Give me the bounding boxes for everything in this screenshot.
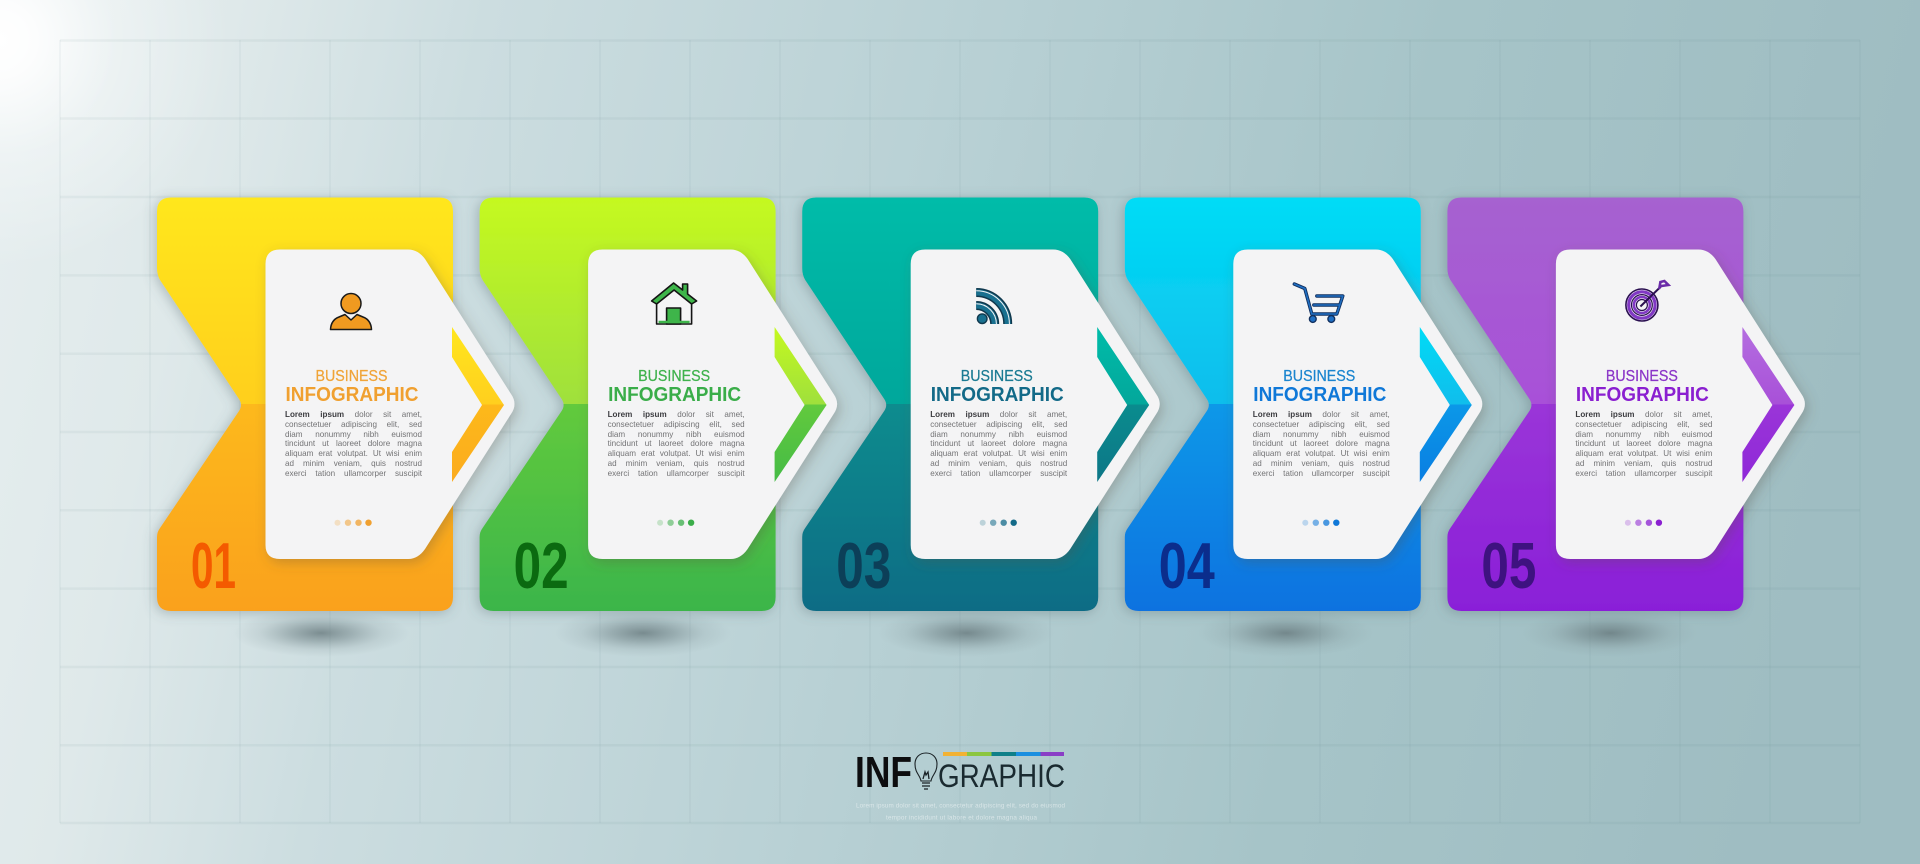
body text 03 <box>930 410 1067 480</box>
body text 02: aliquam erat volutpat. Ut wisi enim <box>608 449 745 458</box>
heading 05: INFOGRAPHIC <box>1576 384 1709 406</box>
icon: shopping cart <box>1294 284 1343 322</box>
body text 05: consectetuer adipiscing elit, sed <box>1575 420 1712 429</box>
pagination dots 01 <box>334 520 372 526</box>
colored chevron card 01 <box>157 198 453 611</box>
heading 03: BUSINESS <box>961 368 1033 385</box>
number 01: 01 <box>191 529 236 602</box>
panel: step 04 <box>1125 198 1482 657</box>
number 02: 02 <box>514 529 569 602</box>
body text 05: exerci tation ullamcorper suscipit <box>1575 468 1712 478</box>
heading 04: INFOGRAPHIC <box>1253 384 1386 406</box>
white content card 05 <box>1556 250 1805 559</box>
body text 02: exerci tation ullamcorper suscipit <box>608 468 745 478</box>
body text 01: Lorem ipsum dolor sit amet, <box>285 410 422 419</box>
heading 05: BUSINESS <box>1606 368 1678 385</box>
body text 03: diam nonummy nibh euismod <box>930 430 1067 438</box>
body text 01: ad minim veniam, quis nostrud <box>285 459 422 468</box>
body text 03: ad minim veniam, quis nostrud <box>930 459 1067 468</box>
heading 04: BUSINESS <box>1283 368 1355 385</box>
colored chevron card 03 <box>802 198 1098 611</box>
body text 03: exerci tation ullamcorper suscipit <box>930 468 1067 478</box>
caption: Lorem ipsum dolor sit amet, consectetur adipiscing elit, sed do eiusmod <box>856 802 1065 810</box>
pagination dots 03 <box>980 520 1017 526</box>
floor shadow 05 <box>1522 609 1698 657</box>
panel: step 03 <box>802 198 1160 657</box>
body text 02: Lorem ipsum dolor sit amet, <box>608 410 745 419</box>
number 04: 04 <box>1159 529 1215 602</box>
floor shadow 01 <box>233 609 409 657</box>
heading 02: BUSINESS <box>638 368 710 385</box>
pagination dots 04 <box>1302 520 1340 526</box>
heading 03: INFOGRAPHIC <box>931 384 1064 406</box>
floor shadow 02 <box>555 609 731 657</box>
number 03: 03 <box>836 529 891 602</box>
heading 04 <box>1253 368 1386 406</box>
body text 03: aliquam erat volutpat. Ut wisi enim <box>930 449 1067 458</box>
body text 04: exerci tation ullamcorper suscipit <box>1253 468 1390 478</box>
panel: step 01 <box>157 198 514 657</box>
colored chevron card 05 <box>1447 198 1743 611</box>
body text 04: ad minim veniam, quis nostrud <box>1253 459 1390 468</box>
floor shadow 04 <box>1198 609 1374 657</box>
body text 05: Lorem ipsum dolor sit amet, <box>1575 410 1712 419</box>
colored chevron card 04 <box>1125 198 1421 611</box>
icon: wifi signal <box>976 291 1009 324</box>
pagination dots 02 <box>657 520 694 526</box>
body text 04: tincidunt ut laoreet dolore magna <box>1253 439 1390 448</box>
heading 01: INFOGRAPHIC <box>286 384 418 406</box>
heading 01 <box>286 368 418 406</box>
body text 04: consectetuer adipiscing elit, sed <box>1253 420 1390 429</box>
icon: house <box>652 283 697 324</box>
rainbow bar <box>943 752 1064 756</box>
heading 01: BUSINESS <box>316 368 388 385</box>
body text 03: consectetuer adipiscing elit, sed <box>930 420 1067 429</box>
colored chevron card 02 <box>480 198 776 611</box>
body text 01: exerci tation ullamcorper suscipit <box>285 468 422 478</box>
panel: step 02 <box>480 198 837 657</box>
body text 04: Lorem ipsum dolor sit amet, <box>1253 410 1390 419</box>
arrow accent 02 <box>775 327 827 482</box>
body text 01: tincidunt ut laoreet dolore magna <box>285 439 422 448</box>
arrow accent 03 <box>1097 327 1149 482</box>
body text 01 <box>285 410 422 480</box>
body text 01: diam nonummy nibh euismod <box>285 430 422 438</box>
body text 02: consectetuer adipiscing elit, sed <box>608 420 745 429</box>
panel: step 05 <box>1447 198 1805 657</box>
heading 03 <box>931 368 1064 406</box>
logo word INF: INF <box>855 748 912 797</box>
body text 05: ad minim veniam, quis nostrud <box>1575 459 1712 468</box>
body text 05 <box>1575 410 1712 480</box>
heading 02 <box>608 368 741 406</box>
arrow accent 05 <box>1742 327 1794 482</box>
number 05: 05 <box>1481 529 1536 602</box>
body text 04 <box>1253 410 1390 480</box>
floor shadow 03 <box>879 609 1055 657</box>
heading 02: INFOGRAPHIC <box>608 384 741 406</box>
arrow accent 01 <box>452 327 504 482</box>
body text 01: aliquam erat volutpat. Ut wisi enim <box>285 449 422 458</box>
white content card 03 <box>911 250 1160 559</box>
body text 05: aliquam erat volutpat. Ut wisi enim <box>1575 449 1712 458</box>
body text 04: aliquam erat volutpat. Ut wisi enim <box>1253 449 1390 458</box>
body text 02: ad minim veniam, quis nostrud <box>608 459 745 468</box>
body text 02: tincidunt ut laoreet dolore magna <box>608 439 745 448</box>
body text 02: diam nonummy nibh euismod <box>608 430 745 438</box>
body text 05: diam nonummy nibh euismod <box>1575 430 1712 438</box>
white content card 04 <box>1233 250 1482 559</box>
body text 02 <box>608 410 745 480</box>
body text 04: diam nonummy nibh euismod <box>1253 430 1390 438</box>
body text 05: tincidunt ut laoreet dolore magna <box>1575 439 1712 448</box>
arrow accent 04 <box>1420 327 1472 482</box>
footer logo <box>855 748 1065 822</box>
icon: light bulb <box>915 753 937 789</box>
body text 03: Lorem ipsum dolor sit amet, <box>930 410 1067 419</box>
caption: tempor incididunt ut labore et dolore magna aliqua <box>886 814 1037 822</box>
caption <box>856 802 1065 822</box>
white content card 02 <box>588 250 837 559</box>
pagination dots 05 <box>1625 520 1662 526</box>
logo word GRAPHIC: GRAPHIC <box>938 758 1065 794</box>
white content card 01 <box>266 250 514 559</box>
icon: target with arrow <box>1626 281 1668 321</box>
icon: person <box>330 294 372 330</box>
body text 03: tincidunt ut laoreet dolore magna <box>930 439 1067 448</box>
heading 05 <box>1576 368 1709 406</box>
body text 01: consectetuer adipiscing elit, sed <box>285 420 422 429</box>
